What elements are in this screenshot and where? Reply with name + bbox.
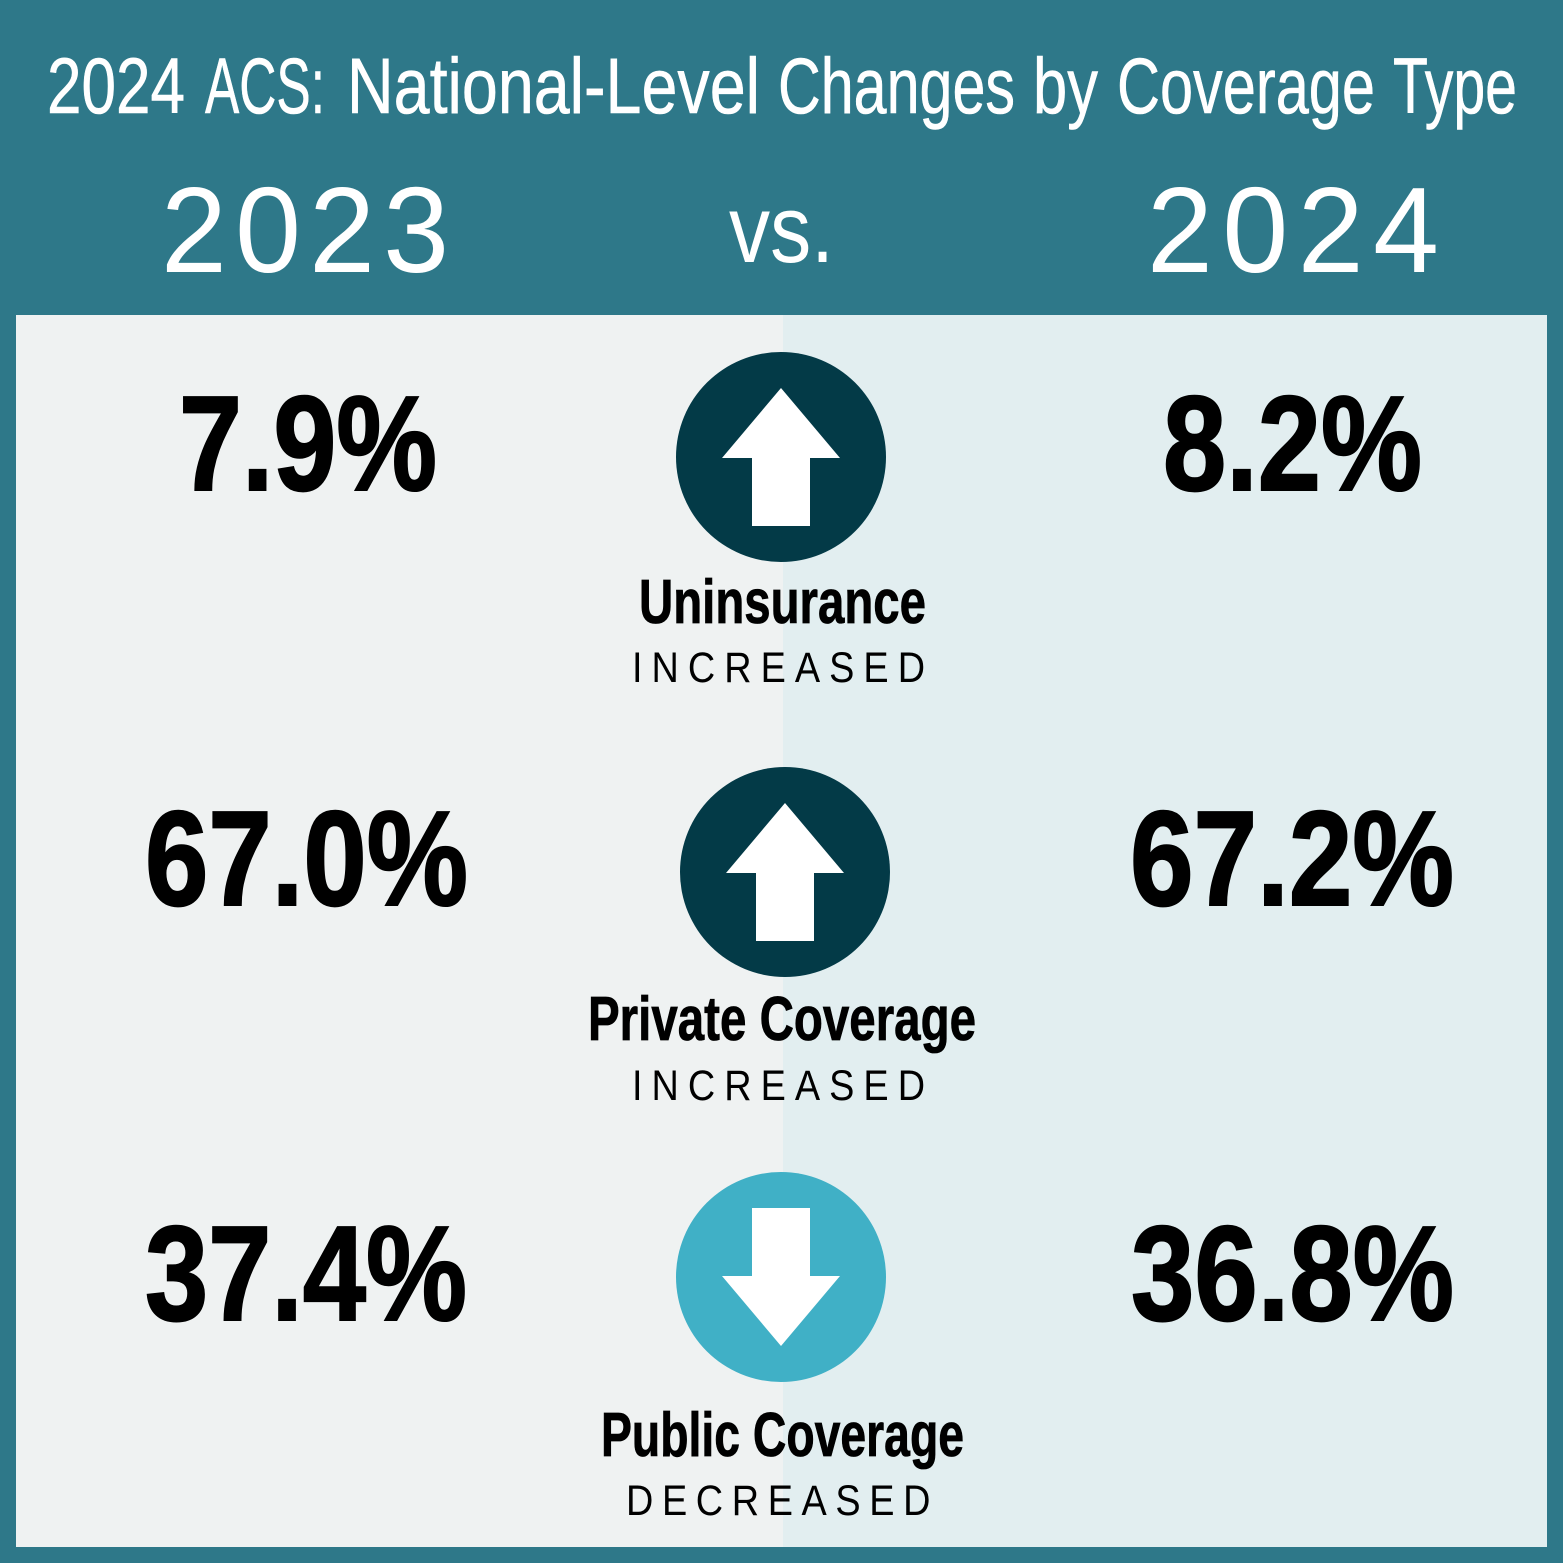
- status: increased: INCREASED: [632, 1061, 925, 1110]
- value: 2024 private: 67.2%: [1130, 783, 1454, 934]
- label: uninsurance: Uninsurance: [639, 568, 926, 637]
- row: uninsurance: [179, 352, 1422, 692]
- value: 2023 uninsurance: 7.9%: [179, 368, 437, 519]
- heading: 2023: 2023: [161, 162, 449, 298]
- label: public coverage: Public Coverage: [601, 1401, 964, 1470]
- title: by: [1033, 41, 1098, 130]
- panel: 2023 side: [16, 315, 783, 1547]
- value: 2024 public: 36.8%: [1131, 1198, 1454, 1349]
- row: public coverage: [145, 1172, 1454, 1525]
- title: ACS:: [205, 41, 325, 130]
- heading: vs.: vs.: [729, 176, 834, 283]
- title: National-Level: [347, 41, 760, 130]
- title: Changes: [778, 41, 1015, 130]
- icon: up arrow: [680, 767, 890, 977]
- title: Type: [1393, 41, 1517, 130]
- icon: up arrow: [676, 352, 886, 562]
- title: [47, 41, 1517, 130]
- value: 2024 uninsurance: 8.2%: [1163, 368, 1422, 519]
- title: Coverage: [1117, 41, 1375, 130]
- status: decreased: DECREASED: [626, 1476, 930, 1525]
- heading: 2024: 2024: [1147, 162, 1439, 298]
- value: 2023 public: 37.4%: [145, 1198, 467, 1349]
- value: 2023 private: 67.0%: [145, 783, 468, 934]
- title: 2024: [47, 41, 185, 130]
- icon: down arrow: [676, 1172, 886, 1382]
- label: private coverage: Private Coverage: [588, 985, 976, 1054]
- row: private coverage: [145, 767, 1454, 1110]
- status: increased: INCREASED: [632, 643, 925, 692]
- panel: 2024 side: [783, 315, 1547, 1547]
